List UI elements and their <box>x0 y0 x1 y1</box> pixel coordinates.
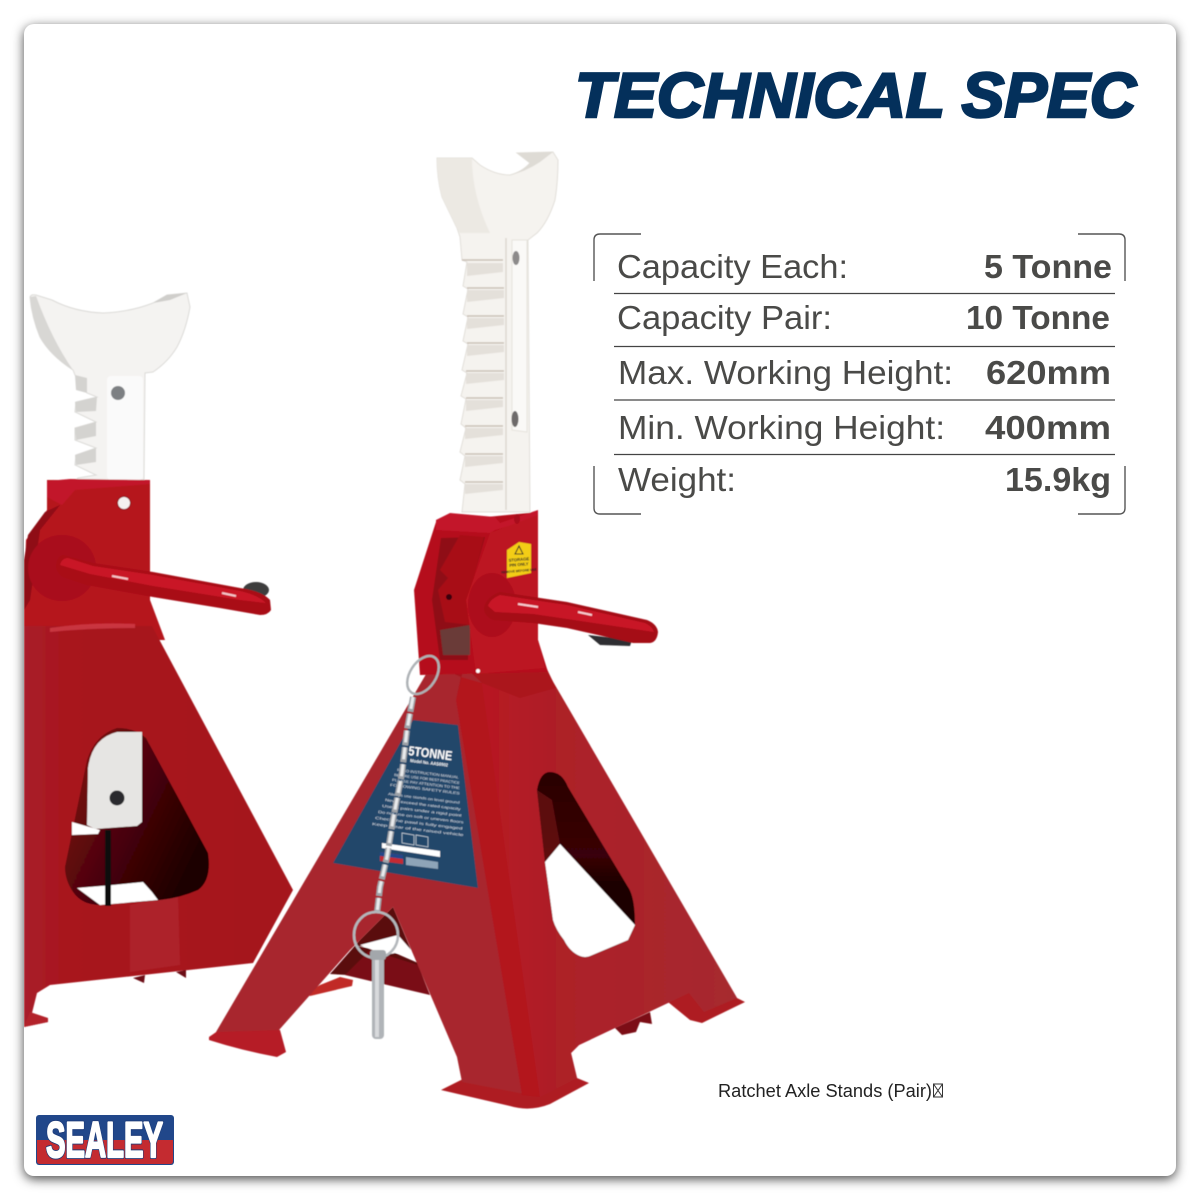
instruction tag: Keep clear of the raised vehicle <box>372 822 464 837</box>
rear stand handle <box>56 555 271 615</box>
table corner brackets <box>594 234 1125 514</box>
rear stand base <box>24 624 293 1027</box>
instruction tag: PLEASE PAY ATTENTION TO THE <box>392 778 461 790</box>
illustration: front axle stand <box>209 152 745 1109</box>
instruction tag: Use in pairs under a rigid point <box>382 804 462 818</box>
row: capacity each: 5 Tonne <box>984 248 1112 285</box>
row: capacity each <box>617 248 1112 285</box>
instruction tag: BEFORE USE FOR BEST PRACTICE <box>394 773 461 785</box>
row: capacity pair <box>617 299 1110 336</box>
base window <box>537 772 635 957</box>
row: max working height: 620mm <box>986 354 1111 391</box>
logo: Sealey: SEALEY <box>46 1112 163 1168</box>
row: capacity pair: Capacity Pair: <box>617 299 832 336</box>
spec table <box>594 234 1125 514</box>
foot plates and gap behind legs <box>209 907 745 1109</box>
locking pin and chain <box>354 650 445 1039</box>
row: max working height <box>618 354 1111 391</box>
warning label: REMOVE BEFORE USE <box>501 567 537 575</box>
instruction tag: READ INSTRUCTION MANUAL <box>397 768 459 780</box>
row: min working height <box>618 409 1111 446</box>
handle <box>484 592 658 646</box>
instruction tag: Model No. AAS6902 <box>410 758 449 768</box>
instruction tag: Never exceed the rated capacity <box>385 798 461 811</box>
title: TECHNICAL SPEC <box>575 61 1138 131</box>
instruction tag: FOLLOWING SAFETY RULES <box>390 783 461 796</box>
warning label: STORAGE <box>508 556 530 563</box>
warning label: PIN ONLY <box>509 561 529 568</box>
rear stand head block <box>24 479 165 640</box>
row: weight: 15.9kg <box>1005 461 1111 498</box>
saddle and ratchet post <box>437 152 558 512</box>
row: weight <box>618 461 1111 498</box>
caption: Ratchet Axle Stands (Pair) <box>718 1081 932 1101</box>
row: capacity each: Capacity Each: <box>617 248 848 285</box>
head block <box>414 510 548 675</box>
row: min working height: Min. Working Height: <box>618 409 945 446</box>
rear stand window <box>65 728 209 905</box>
instruction tag: Check the pawl is fully engaged <box>375 816 463 831</box>
logo: Sealey <box>36 1112 174 1168</box>
instruction tag: Always use stands on level ground <box>388 792 460 805</box>
illustration: rear axle stand <box>24 293 293 1027</box>
row: min working height: 400mm <box>985 409 1111 446</box>
warning label <box>501 542 537 578</box>
logo: Sealey: SEALEY <box>46 1112 163 1168</box>
instruction tag: Do not use on soft or uneven floors <box>378 810 464 825</box>
row: weight: Weight: <box>618 461 736 498</box>
row: capacity pair: 10 Tonne <box>966 299 1110 336</box>
instruction tag: 5TONNE <box>408 743 453 763</box>
instruction tag <box>333 720 478 888</box>
base body <box>216 640 737 1097</box>
rear stand saddle and ratchet post <box>30 293 190 480</box>
row: max working height: Max. Working Height: <box>618 354 953 391</box>
